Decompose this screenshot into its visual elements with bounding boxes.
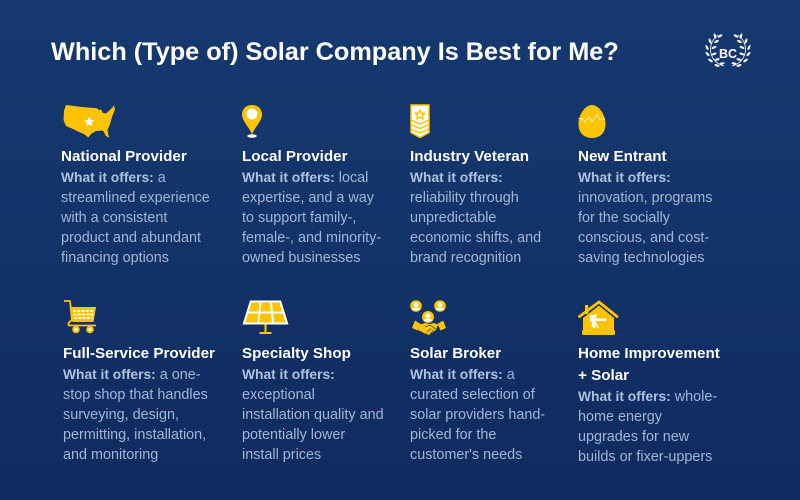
- card: Solar Broker: [410, 345, 545, 463]
- title: Which (Type of) Solar Company Is Best for Me?: [51, 38, 619, 66]
- card: Industry Veteran: economic shifts, and: [410, 230, 541, 246]
- card: Home Improvement + Solar: upgrades for new: [578, 429, 689, 445]
- card: Home Improvement + Solar: Home Improvement: [578, 345, 720, 362]
- card: Industry Veteran: unpredictable: [410, 210, 496, 226]
- card: Home Improvement + Solar: [578, 345, 720, 465]
- card: Home Improvement + Solar: What it offers: whole-: [578, 389, 717, 405]
- logo: BC laurel: BC: [719, 47, 737, 61]
- card: Specialty Shop: Specialty Shop: [242, 345, 351, 362]
- card: Industry Veteran: brand recognition: [410, 250, 521, 266]
- card: Industry Veteran: reliability through: [410, 190, 519, 206]
- card: Local Provider: owned businesses: [242, 250, 360, 266]
- card: Local Provider: Local Provider: [242, 148, 348, 165]
- card: Industry Veteran: [410, 148, 541, 266]
- card: Specialty Shop: [242, 345, 384, 463]
- card: National Provider: What it offers: a: [61, 170, 166, 186]
- card: Specialty Shop: What it offers:: [242, 367, 335, 382]
- card: Solar Broker: curated selection of: [410, 387, 535, 403]
- icon: location pin: [242, 105, 262, 138]
- card: Local Provider: [242, 148, 381, 266]
- icon: cracked egg: [578, 105, 606, 138]
- card: Full-Service Provider: surveying, design,: [63, 407, 179, 423]
- card: Specialty Shop: install prices: [242, 447, 321, 463]
- card: Local Provider: expertise, and a way: [242, 190, 374, 206]
- card: Industry Veteran: Industry Veteran: [410, 148, 529, 165]
- card: Local Provider: to support family-,: [242, 210, 356, 226]
- card: Industry Veteran: What it offers:: [410, 170, 503, 185]
- card: Full-Service Provider: What it offers: a one-: [63, 367, 201, 383]
- card: National Provider: streamlined experience: [61, 190, 210, 206]
- icon: chevron badge: [410, 104, 430, 138]
- card: Full-Service Provider: [63, 345, 215, 463]
- card: Full-Service Provider: and monitoring: [63, 447, 158, 463]
- icon: shopping cart: [64, 300, 96, 334]
- card: Specialty Shop: potentially lower: [242, 427, 345, 443]
- card: Solar Broker: picked for the: [410, 427, 496, 443]
- card: Local Provider: What it offers: local: [242, 170, 368, 186]
- card: New Entrant: for the socially: [578, 210, 670, 226]
- card: New Entrant: conscious, and cost-: [578, 230, 709, 246]
- card: Solar Broker: What it offers: a: [410, 367, 515, 383]
- card: Home Improvement + Solar: + Solar: [578, 367, 629, 384]
- card: Specialty Shop: installation quality and: [242, 407, 384, 423]
- card: New Entrant: What it offers:: [578, 170, 671, 185]
- card: New Entrant: [578, 148, 712, 266]
- card: New Entrant: New Entrant: [578, 148, 667, 165]
- card: Home Improvement + Solar: home energy: [578, 409, 662, 425]
- card: Specialty Shop: exceptional: [242, 387, 315, 403]
- card: Full-Service Provider: permitting, installation,: [63, 427, 206, 443]
- logo: BC laurel: [705, 34, 751, 67]
- card: National Provider: National Provider: [61, 148, 187, 165]
- icon: USA map with star: [64, 105, 115, 138]
- card: National Provider: with a consistent: [61, 210, 167, 226]
- icon: people and handshake: [410, 300, 446, 335]
- card: Solar Broker: solar providers hand-: [410, 407, 545, 423]
- card: Solar Broker: customer's needs: [410, 447, 522, 463]
- card: Full-Service Provider: Full-Service Provider: [63, 345, 215, 362]
- card: National Provider: product and abundant: [61, 230, 201, 246]
- card: National Provider: [61, 148, 210, 266]
- card: New Entrant: saving technologies: [578, 250, 704, 266]
- card: Full-Service Provider: stop shop that handles: [63, 387, 208, 403]
- card: National Provider: financing options: [61, 250, 169, 266]
- icon: solar panel: [242, 300, 288, 334]
- card: Local Provider: female-, and minority-: [242, 230, 381, 246]
- icon: house with tools: [578, 300, 618, 335]
- card: Home Improvement + Solar: builds or fixer-uppers: [578, 449, 712, 465]
- card: Solar Broker: Solar Broker: [410, 345, 501, 362]
- card: New Entrant: innovation, programs: [578, 190, 712, 206]
